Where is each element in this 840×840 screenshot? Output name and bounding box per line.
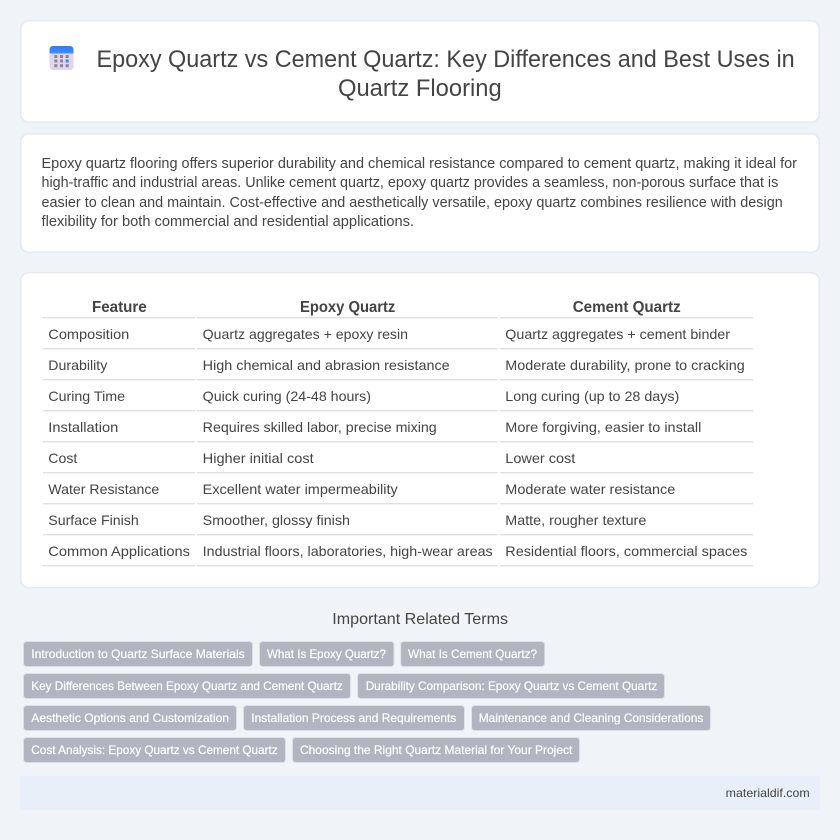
text block: introduction paragraph: easier to clean and maintain. Cost-effective and aesthetically versatile, epoxy quartz combines resilience with design xyxy=(42,195,783,211)
title: Epoxy Quartz vs Cement Quartz: Key Differences and Best Uses in xyxy=(96,46,795,73)
table row: installation: More forgiving, easier to install xyxy=(505,419,701,435)
table header row: Epoxy Quartz xyxy=(300,299,395,316)
table row: curing time: Curing Time xyxy=(48,388,125,404)
table row: installation: Requires skilled labor, precise mixing xyxy=(203,419,437,435)
chip: Aesthetic Options and Customization xyxy=(31,711,229,725)
icon: calendar xyxy=(50,46,74,70)
heading: important related terms: Important Related Terms xyxy=(332,611,508,628)
table row: durability xyxy=(48,357,745,373)
chip: Installation Process and Requirements xyxy=(251,711,456,725)
table row: composition: Quartz aggregates + cement binder xyxy=(505,326,730,342)
table header row: Feature xyxy=(92,299,147,316)
table row: water resistance: Excellent water impermeability xyxy=(203,481,398,497)
footer bar xyxy=(20,776,820,810)
panel: title header xyxy=(21,21,819,122)
chip: Key Differences Between Epoxy Quartz and Cement Quartz xyxy=(31,679,343,693)
table row: durability: Moderate durability, prone to cracking xyxy=(505,357,745,373)
text block: introduction paragraph: Epoxy quartz flooring offers superior durability and chemical resistance compared to cement quartz, making it ideal for xyxy=(42,156,797,172)
table header row xyxy=(92,299,681,316)
table row: cost: Lower cost xyxy=(505,450,575,466)
table row: curing time: Long curing (up to 28 days) xyxy=(505,388,679,404)
table row: water resistance: Moderate water resistance xyxy=(505,481,676,497)
table row: durability: High chemical and abrasion resistance xyxy=(203,357,450,373)
table row: cost: Higher initial cost xyxy=(203,450,314,466)
chip: What Is Epoxy Quartz? xyxy=(267,647,386,661)
table row: common applications: Residential floors, commercial spaces xyxy=(505,543,747,559)
text block: introduction paragraph xyxy=(42,156,797,230)
table row: common applications: Industrial floors, laboratories, high-wear areas xyxy=(203,543,493,559)
chip xyxy=(24,642,252,666)
chip: Cost Analysis: Epoxy Quartz vs Cement Quartz xyxy=(31,743,278,757)
title xyxy=(96,46,795,102)
chip xyxy=(472,706,710,730)
table row: water resistance: Water Resistance xyxy=(48,481,160,497)
chip xyxy=(24,706,236,730)
title: Quartz Flooring xyxy=(338,75,502,102)
table row: installation xyxy=(48,419,701,435)
table row: surface finish: Surface Finish xyxy=(48,512,139,528)
panel: introduction xyxy=(21,134,819,252)
chip: Choosing the Right Quartz Material for Your Project xyxy=(300,743,573,757)
table row: composition: Composition xyxy=(48,326,129,342)
text block: introduction paragraph: high-traffic and industrial areas. Unlike cement quartz, epoxy quartz provides a seamless, non-porous surface that is xyxy=(42,175,778,191)
chip xyxy=(244,706,464,730)
chip xyxy=(260,642,394,666)
table row: water resistance xyxy=(48,481,676,497)
table row: surface finish: Matte, rougher texture xyxy=(505,512,647,528)
chip: Durability Comparison: Epoxy Quartz vs Cement Quartz xyxy=(366,679,657,693)
footer site name: materialdif.com xyxy=(726,786,810,800)
chip: Introduction to Quartz Surface Materials xyxy=(31,647,245,661)
related terms chips xyxy=(24,642,710,762)
chip xyxy=(24,674,350,698)
table row: composition xyxy=(48,326,730,342)
table row: surface finish xyxy=(48,512,647,528)
text block: introduction paragraph: flexibility for both commercial and residential applications. xyxy=(42,214,414,230)
table row: cost xyxy=(48,450,575,466)
table row: durability: Durability xyxy=(48,357,107,373)
panel: comparison table xyxy=(21,273,819,588)
chip xyxy=(292,738,580,762)
chip xyxy=(24,738,286,762)
chip xyxy=(358,674,664,698)
table row: composition: Quartz aggregates + epoxy resin xyxy=(203,326,408,342)
table row: common applications xyxy=(48,543,747,559)
table row: common applications: Common Applications xyxy=(48,543,190,559)
chip: What Is Cement Quartz? xyxy=(408,647,537,661)
chip: Maintenance and Cleaning Considerations xyxy=(479,711,703,725)
table row: installation: Installation xyxy=(48,419,118,435)
table row: surface finish: Smoother, glossy finish xyxy=(203,512,350,528)
table row: curing time xyxy=(48,388,679,404)
chip xyxy=(401,642,545,666)
table header row: Cement Quartz xyxy=(573,299,681,316)
table row: cost: Cost xyxy=(48,450,77,466)
table row: curing time: Quick curing (24-48 hours) xyxy=(203,388,371,404)
